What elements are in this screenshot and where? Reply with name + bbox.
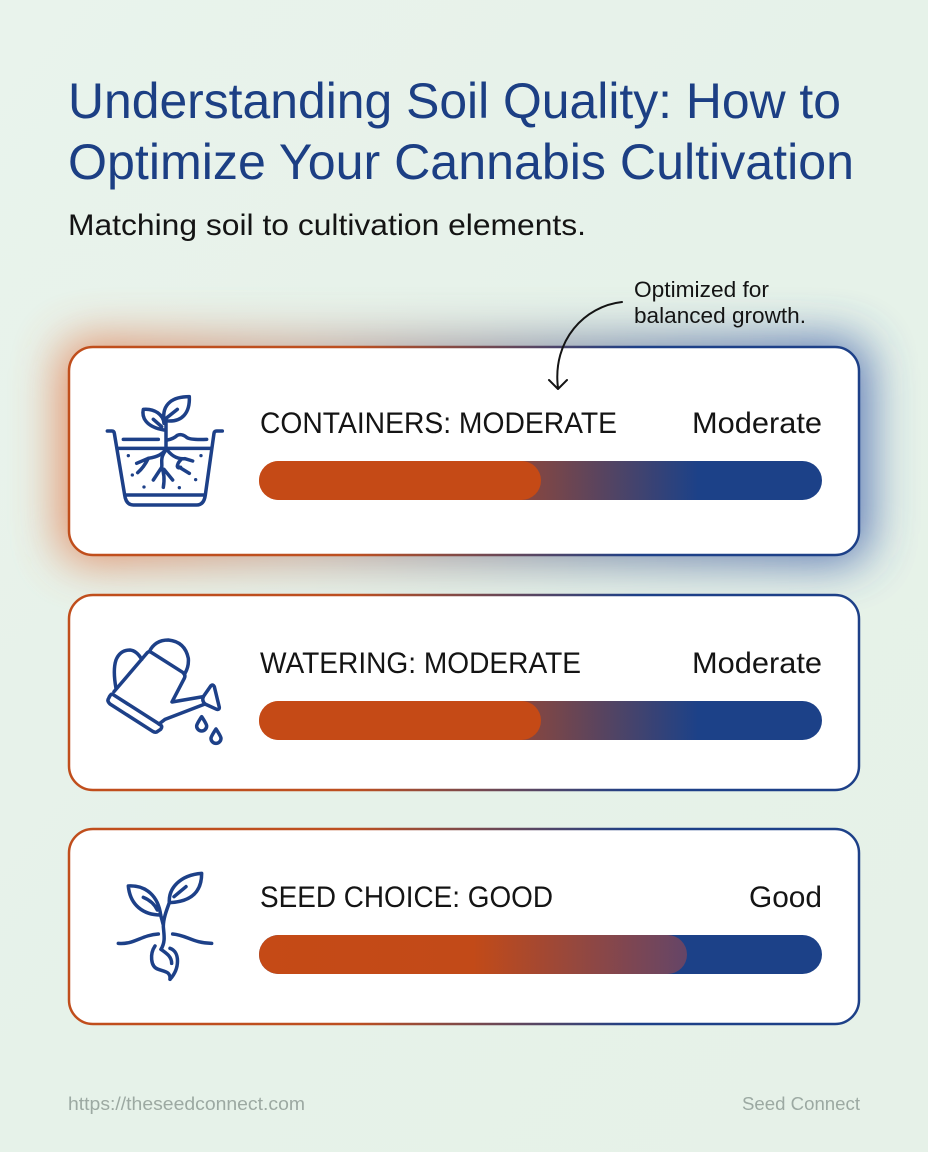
value: seed choice: Good (749, 881, 822, 914)
panel: seed choice (69, 829, 859, 1024)
footer: brand: Seed Connect (742, 1094, 860, 1114)
callout: optimized for balanced growth (549, 277, 806, 389)
bar: watering (259, 701, 822, 740)
panel: containers (60, 340, 868, 562)
arrow (549, 302, 622, 389)
bar: seed choice (259, 935, 822, 974)
icon: watering can (108, 640, 221, 743)
bar: containers (259, 461, 822, 500)
title (68, 73, 854, 190)
callout: optimized for balanced growth: balanced growth. (634, 303, 806, 328)
subtitle: Matching soil to cultivation elements. (68, 209, 586, 242)
icon: sprouting seed (118, 873, 212, 979)
value: containers: Moderate (692, 407, 822, 440)
title: Optimize Your Cannabis Cultivation (68, 134, 854, 190)
footer: url: https://theseedconnect.com (68, 1094, 305, 1114)
title: Understanding Soil Quality: How to (68, 73, 841, 129)
panel: watering (69, 595, 859, 790)
label: seed choice: SEED CHOICE: GOOD (260, 881, 553, 914)
callout: optimized for balanced growth: Optimized for (634, 277, 769, 302)
icon: plant in soil container (107, 397, 222, 505)
value: watering: Moderate (692, 647, 822, 680)
label: containers: CONTAINERS: MODERATE (260, 407, 617, 440)
label: watering: WATERING: MODERATE (260, 647, 581, 680)
